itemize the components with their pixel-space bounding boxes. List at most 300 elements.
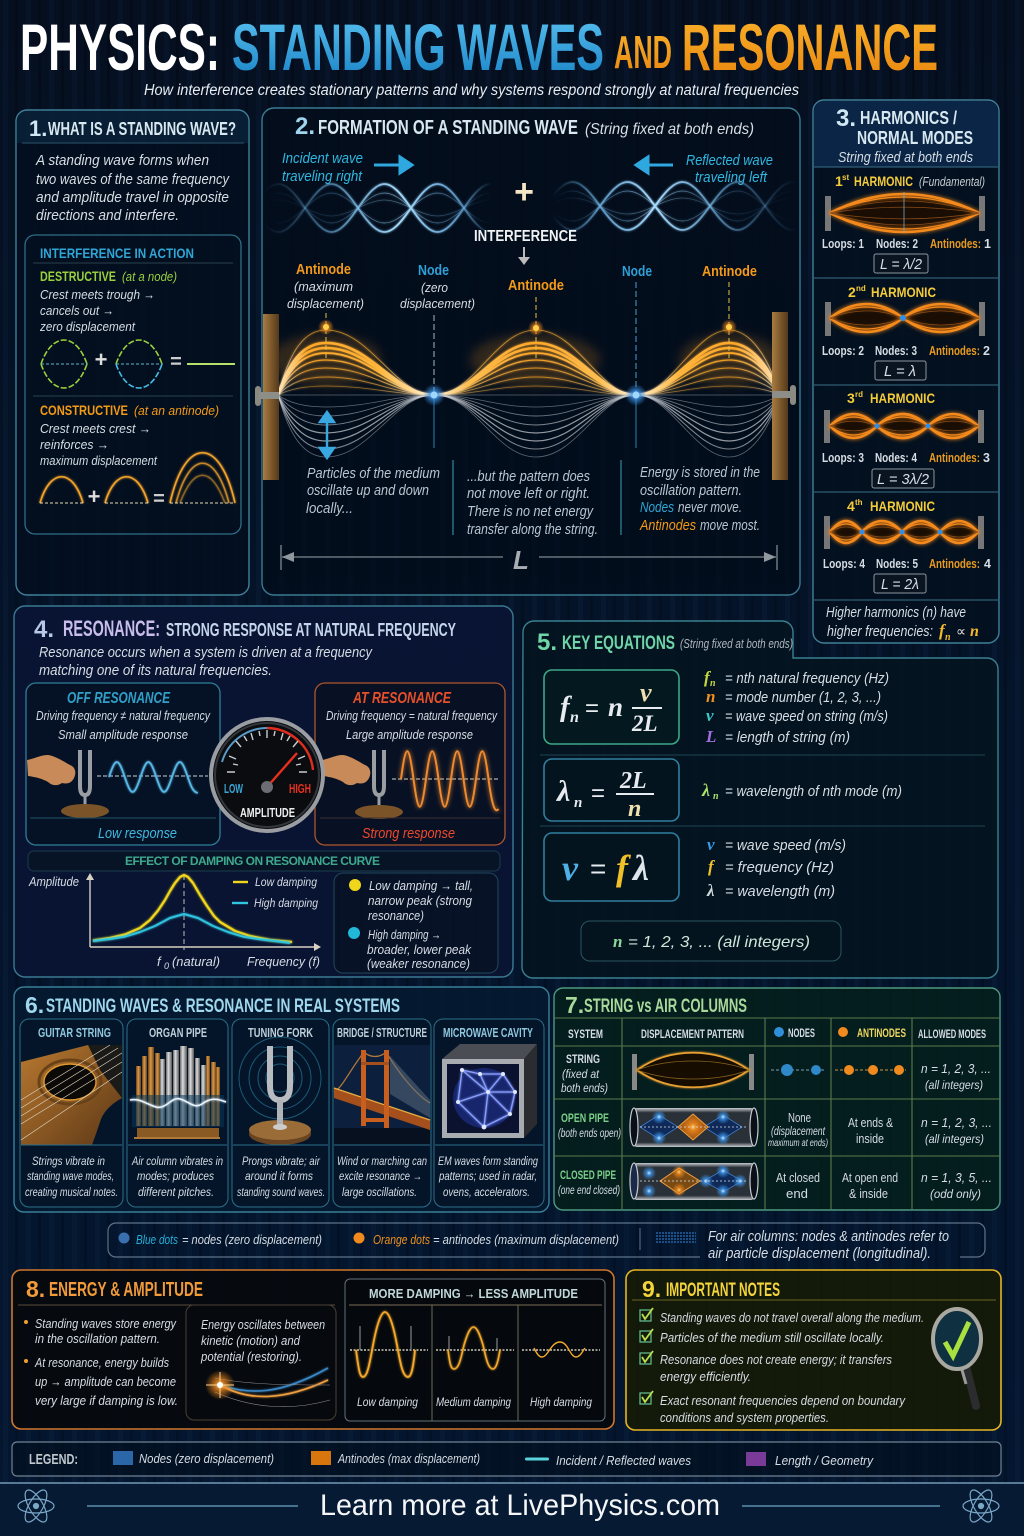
1st harmonic: (Fundamental) [919,175,985,189]
icon: hand striking fork [322,755,370,785]
3rd harmonic: L = 3λ/2 [877,471,930,488]
card: tuning fork: TUNING FORK [248,1026,313,1040]
1st harmonic: L = λ/2 [880,256,923,273]
constructive: CONSTRUCTIVE [40,402,128,418]
damping notes: broader, lower peak [367,942,472,957]
4th harmonic: Nodes: 5 [876,557,918,571]
antinode label 3: Antinode [702,264,757,280]
row: closed pipe: n = 1, 3, 5, ... [921,1170,992,1185]
icon: tuning fork [374,750,384,808]
harmonics footnote: f [939,621,947,640]
heading 2: FORMATION OF A STANDING WAVE [318,117,578,139]
energy bullets: in the oscillation pattern. [35,1331,160,1346]
legend: natural frequency terms: = nth natural frequency (Hz) [725,671,889,687]
high damping wave [534,1342,585,1357]
energy oscillation box: potential (restoring). [200,1349,302,1364]
3rd harmonic: 3 [983,451,990,465]
destructive: Crest meets trough → [40,287,155,302]
heading 4: STRONG RESPONSE AT NATURAL FREQUENCY [166,620,456,640]
heading 5 [537,629,793,656]
checklist: Resonance does not create energy; it transfers [660,1352,892,1367]
card: organ pipe: Air column vibrates in [131,1154,223,1168]
legend: Nodes (zero displacement) [139,1451,274,1466]
caption: energy stored: never move. [678,500,742,516]
legend: wavelength: n [713,791,719,802]
caption: energy stored: Energy is stored in the [640,465,760,481]
resonance curve chart: Frequency (f) [247,954,320,969]
legend: Length / Geometry [775,1453,874,1468]
reflected wave: Reflected wave [686,153,773,169]
3rd harmonic: 3 [847,390,855,406]
damping notes: resonance) [368,908,424,923]
resonance curve chart: Amplitude [28,874,79,889]
heading 3 [836,105,973,166]
3rd harmonic: HARMONIC [870,390,935,406]
equation: natural frequency: f [560,691,573,723]
2nd harmonic: Antinodes: [929,344,980,358]
2nd harmonic: nd [856,284,866,293]
row: closed pipe: & inside [849,1186,888,1201]
destructive [39,268,235,388]
legend: wave speed terms: = frequency (Hz) [725,860,834,876]
resonance curve chart: Low damping [255,875,317,889]
legend: wave speed terms: λ [706,881,715,900]
heading 1 [29,116,236,141]
panel 1: what is a standing wave [16,110,249,595]
legend: natural frequency terms: = length of string (m) [725,730,850,746]
caption: pattern does not move: ...but the pattern does [467,469,590,485]
card: bridge: Wind or marching can [337,1154,427,1168]
3rd harmonic [822,390,990,488]
4th harmonic: 4 [984,557,991,571]
resonance definition [39,645,373,679]
1st harmonic: HARMONIC [854,173,913,189]
1st harmonic [822,173,991,273]
heading 2: (String fixed at both ends) [585,121,754,138]
caption: pattern does not move: transfer along the string. [467,522,598,538]
2nd harmonic: 2 [848,284,856,300]
node label 2 [622,264,652,448]
heading 6: 6. [25,992,44,1018]
integer note [581,921,841,961]
row: string: STRING [566,1052,600,1066]
interference label and arrow: INTERFERENCE [474,228,577,245]
length dimension L: L [513,545,529,575]
energy bullets: Standing waves store energy [35,1316,177,1331]
icon: guitar [21,1045,122,1145]
definition text: two waves of the same frequency [36,172,230,188]
heading 9: 9. [642,1276,661,1302]
damping comparison [345,1279,605,1421]
icon: atom right [963,1487,999,1525]
resonance definition: Resonance occurs when a system is driven at a frequency [39,645,373,661]
legend: natural frequency terms: n [710,678,716,689]
damping comparison: Low damping [357,1395,418,1409]
equation: wave speed: f [616,848,631,888]
sub-panel: interference in action: INTERFERENCE IN ACTION [40,245,194,261]
panel 4: resonance [14,606,513,977]
panel 6: real systems [14,987,549,1212]
damping comparison: MORE DAMPING → LESS AMPLITUDE [369,1286,578,1301]
resonance curve chart [28,873,321,971]
checklist: Standing waves do not travel overall along the medium. [660,1310,924,1325]
standing wave string [271,330,780,457]
heading 7 [565,992,747,1018]
card: guitar string: creating musical notes. [25,1185,118,1199]
harmonics footnote: n [945,632,951,643]
1st harmonic: Antinodes: [930,237,981,251]
amplitude gauge: AMPLITUDE [240,806,295,820]
card: guitar string: GUITAR STRING [38,1026,111,1040]
resonance curve chart: High damping [254,896,318,910]
3rd harmonic: rd [855,390,863,399]
1st harmonic: 1 [984,237,991,251]
definition text: A standing wave forms when [35,153,209,169]
row: open pipe: At ends & [848,1115,893,1130]
card: microwave cavity: MICROWAVE CAVITY [443,1026,533,1040]
row: closed pipe: At open end [842,1170,898,1185]
at resonance wave [401,751,498,810]
2nd harmonic [822,284,990,380]
legend: Antinodes (max displacement) [337,1451,480,1466]
card: guitar string [20,1019,123,1207]
integer note: n [613,932,622,951]
row: open pipe [558,1108,992,1149]
right wooden post [772,312,796,480]
equation: natural frequency: = [585,695,599,722]
at resonance box [315,683,505,845]
subtitle: How interference creates stationary patterns and why systems respond strongly at natural frequencies [144,82,799,99]
icon: organ pipes [130,1046,226,1139]
equation: wave speed: v [562,848,579,888]
2nd harmonic: HARMONIC [871,284,936,300]
row: open pipe: maximum at ends) [768,1138,828,1149]
heading 4: 4. [34,616,54,643]
off resonance box: Driving frequency ≠ natural frequency [36,708,211,723]
energy bullets: up → amplitude can become [35,1374,176,1389]
caption: energy stored [639,465,760,534]
sub-panel: interference in action [25,235,241,534]
1st harmonic: st [842,173,849,182]
left wooden post [255,314,279,480]
card: bridge: large oscillations. [342,1185,417,1199]
2nd harmonic: Nodes: 3 [875,344,917,358]
panel 2: formation of a standing wave [252,108,820,595]
damping notes: (weaker resonance) [367,956,470,971]
harmonics footnote: higher frequencies: [827,624,933,640]
equation: wave speed: λ [631,848,649,888]
table header: DISPLACEMENT PATTERN [641,1029,744,1041]
amplitude gauge: LOW [224,782,243,796]
destructive: = [170,351,182,373]
checklist: Particles of the medium still oscillate locally. [660,1330,884,1345]
at resonance box: Strong response [362,825,455,842]
legend: natural frequency terms: n [706,687,715,706]
4th harmonic [823,498,991,593]
note bar: dots key: Blue dots [136,1232,178,1247]
panel 5: key equations [522,621,998,978]
note bar: dots key: air particle displacement (longitudinal). [708,1246,931,1262]
footer [0,1483,1024,1536]
heading 8 [26,1276,203,1302]
damping comparison: Medium damping [436,1395,511,1409]
row: open pipe: inside [856,1131,884,1146]
damping notes: High damping → [368,927,441,942]
caption: pattern does not move: There is no net energy [467,504,594,520]
off resonance box [26,683,220,845]
interference label and arrow [474,228,577,265]
2nd harmonic: L = λ [884,363,916,380]
checklist: conditions and system properties. [660,1410,829,1425]
medium damping wave [448,1327,500,1369]
heading 7: 7. [565,992,584,1018]
damping notes [334,873,498,973]
table header: ANTINODES [857,1028,906,1040]
heading 8: ENERGY & AMPLITUDE [49,1279,203,1301]
off resonance box: Small amplitude response [58,727,188,742]
checklist [640,1308,924,1425]
harmonics footnote: n [970,623,979,640]
equation: wavelength: n [574,795,582,811]
caption: energy stored: move most. [700,518,760,534]
equation: natural frequency: 2L [631,711,658,736]
title: AND [614,26,672,78]
row: closed pipe: end [786,1186,808,1201]
heading 4: RESONANCE: [63,616,160,641]
card: microwave cavity: EM waves form standing [438,1154,538,1168]
card: tuning fork: around it forms [245,1169,313,1183]
row: closed pipe: CLOSED PIPE [560,1168,616,1182]
at resonance box: Large amplitude response [346,727,473,742]
note bar: dots key: Orange dots [373,1232,430,1247]
table header [568,1027,986,1041]
table header: ALLOWED MODES [918,1029,986,1041]
energy oscillation box: Energy oscillates between [201,1317,325,1332]
caption: particles: oscillate up and down [307,483,429,499]
heading 9 [642,1276,780,1302]
constructive: Crest meets crest → [40,421,151,436]
destructive: cancels out → [40,303,114,318]
row: open pipe: (both ends open) [558,1128,621,1140]
destructive: DESTRUCTIVE [40,268,116,284]
incident wave: Incident wave [282,151,363,167]
equation: natural frequency: n [608,692,623,722]
4th harmonic: 4 [847,498,855,514]
equation: natural frequency: n [570,709,579,726]
card: guitar string: Strings vibrate in [32,1154,105,1168]
off resonance box: Low response [98,825,177,842]
icon: hand striking fork [27,755,75,785]
legend: wave speed terms: v [707,835,715,854]
icon: atom left [18,1487,54,1525]
equation: wave speed: = [590,853,606,884]
checklist: energy efficiently. [660,1369,751,1384]
caption: particles: Particles of the medium [307,466,440,482]
1st harmonic: 1 [835,173,843,189]
heading 2: 2. [295,113,315,140]
caption: pattern does not move [467,469,598,538]
heading 1: 1. [29,116,47,141]
row: closed pipe: (odd only) [930,1187,981,1201]
antinode label 1: displacement) [287,296,364,311]
card: organ pipe: modes; produces [137,1169,214,1183]
card: organ pipe [127,1019,228,1207]
damping notes: Low damping → tall, [369,878,473,893]
equation: natural frequency: v [640,678,652,707]
heading 5: 5. [537,629,557,656]
caption: energy stored: Antinodes [639,518,696,534]
equation: wave speed [544,833,679,901]
4th harmonic: Antinodes: [929,557,980,571]
icon: resonant cavity [442,1044,537,1138]
3rd harmonic: Loops: 3 [822,451,864,465]
row: open pipe: n = 1, 2, 3, ... [921,1115,992,1130]
incident wave: traveling right [282,169,363,185]
heading 3: NORMAL MODES [857,128,973,148]
heading 9: IMPORTANT NOTES [666,1280,780,1301]
caption: energy stored: oscillation pattern. [640,483,742,499]
heading 5: KEY EQUATIONS [562,633,675,654]
title [20,10,938,84]
1st harmonic: Loops: 1 [822,237,864,251]
heading 4 [34,616,456,643]
footer: Learn more at LivePhysics.com [320,1489,720,1522]
icon: suspension bridge [334,1045,430,1145]
card: guitar string: standing wave modes, [27,1169,114,1183]
card: bridge: excite resonance → [339,1169,422,1183]
heading 6 [25,992,400,1018]
amplitude gauge: HIGH [289,782,311,796]
checklist: Exact resonant frequencies depend on boundary [660,1393,906,1408]
node label 1: Node [418,263,449,279]
amplitude gauge [211,719,323,831]
legend: natural frequency terms: = mode number (1, 2, 3, ...) [725,690,881,706]
row: string: both ends) [561,1081,608,1095]
off resonance box: OFF RESONANCE [67,690,171,707]
reflected wave: traveling left [695,170,768,186]
card: microwave cavity: patterns; used in radar, [438,1169,537,1183]
resonance curve chart: (natural) [172,954,220,969]
card: bridge [333,1019,431,1207]
energy bullets: very large if damping is low. [35,1393,178,1408]
resonance curve chart: f [157,954,162,969]
legend: natural frequency terms: L [705,727,716,746]
table header: SYSTEM [568,1029,603,1041]
legend: natural frequency terms [704,668,889,746]
note bar: dots key: For air columns: nodes & antinodes refer to [708,1229,949,1245]
note bar: dots key: = nodes (zero displacement) [182,1232,322,1247]
row: string: n = 1, 2, 3, ... [921,1061,991,1076]
legend: wavelength: = wavelength of nth mode (m) [725,784,902,800]
antinode label 2: Antinode [508,278,564,294]
at resonance box: Driving frequency = natural frequency [326,708,498,723]
antinode label 1: Antinode [296,262,351,278]
row: open pipe: None [788,1110,811,1125]
equation: wavelength [544,759,679,822]
card: organ pipe: ORGAN PIPE [149,1026,207,1040]
energy bullets [24,1316,178,1408]
node label 1: (zero [421,280,448,295]
heading 7: STRING vs AIR COLUMNS [584,996,747,1017]
definition text: directions and interfere. [36,208,179,224]
card: microwave cavity [434,1019,544,1207]
antinode label 1 [287,262,364,358]
constructive: + [88,484,100,509]
definition text: and amplitude travel in opposite [36,190,229,206]
node label 2: Node [622,264,652,280]
row: open pipe: OPEN PIPE [561,1111,609,1125]
node label 1: displacement) [400,296,475,311]
heading 3: 3. [836,105,856,132]
energy oscillation box [186,1305,336,1420]
legend [12,1442,1001,1476]
icon: tuning fork [80,750,90,808]
integer note: = 1, 2, 3, ... (all integers) [628,934,810,951]
legend: natural frequency terms: f [704,668,712,687]
panel 8: energy and amplitude [12,1270,614,1429]
antinode label 1: (maximum [294,279,353,294]
harmonics footnote: Higher harmonics (n) have [826,605,966,621]
definition text [35,153,230,224]
heading 5: (String fixed at both ends) [680,636,793,651]
2nd harmonic: 2 [983,344,990,358]
node label 1 [400,263,475,448]
resonance curve chart: 0 [164,961,169,971]
reflected wave [545,153,820,230]
table header: NODES [788,1028,815,1040]
card: microwave cavity: ovens, accelerators. [443,1185,530,1199]
damping header: EFFECT OF DAMPING ON RESONANCE CURVE [125,854,380,868]
constructive: maximum displacement [40,453,158,468]
3rd harmonic: Antinodes: [929,451,980,465]
antinode label 3 [702,264,757,358]
antinode label 2 [508,278,564,358]
title: STANDING WAVES [232,10,604,84]
legend: LEGEND: [29,1451,78,1468]
icon: magnifier with check [933,1309,981,1406]
legend: wavelength [701,780,902,802]
row: open pipe: (displacement [771,1126,826,1138]
constructive: reinforces → [40,437,109,452]
heading 2 [295,113,754,140]
at resonance box: AT RESONANCE [352,690,452,707]
equation: wavelength: = [591,780,605,807]
equation: wavelength: 2L [619,768,647,794]
heading 8: 8. [26,1276,45,1302]
card: tuning fork [232,1019,329,1207]
note bar: dots key: = antinodes (maximum displacement) [433,1232,619,1247]
panel 7: string vs air columns [554,988,1000,1210]
caption: particles [306,466,440,517]
resonance definition: matching one of its natural frequencies. [39,663,272,679]
destructive: + [95,347,107,372]
4th harmonic: Loops: 4 [823,557,865,571]
caption: pattern does not move: not move left or right. [467,486,590,502]
damping comparison: High damping [530,1395,592,1409]
legend: natural frequency terms: v [706,706,714,725]
constructive: = [153,488,165,510]
card: tuning fork: standing sound waves. [237,1185,325,1199]
card: organ pipe: different pitches. [138,1185,214,1199]
equation: wavelength: n [628,796,641,822]
4th harmonic: HARMONIC [870,498,935,514]
3rd harmonic: Nodes: 4 [875,451,917,465]
row: closed pipe: At closed [776,1170,820,1185]
icon: sound rings [239,1037,321,1119]
row: closed pipe: (one end closed) [558,1185,620,1197]
row: open pipe: (all integers) [925,1132,984,1146]
title: PHYSICS: [20,10,220,84]
